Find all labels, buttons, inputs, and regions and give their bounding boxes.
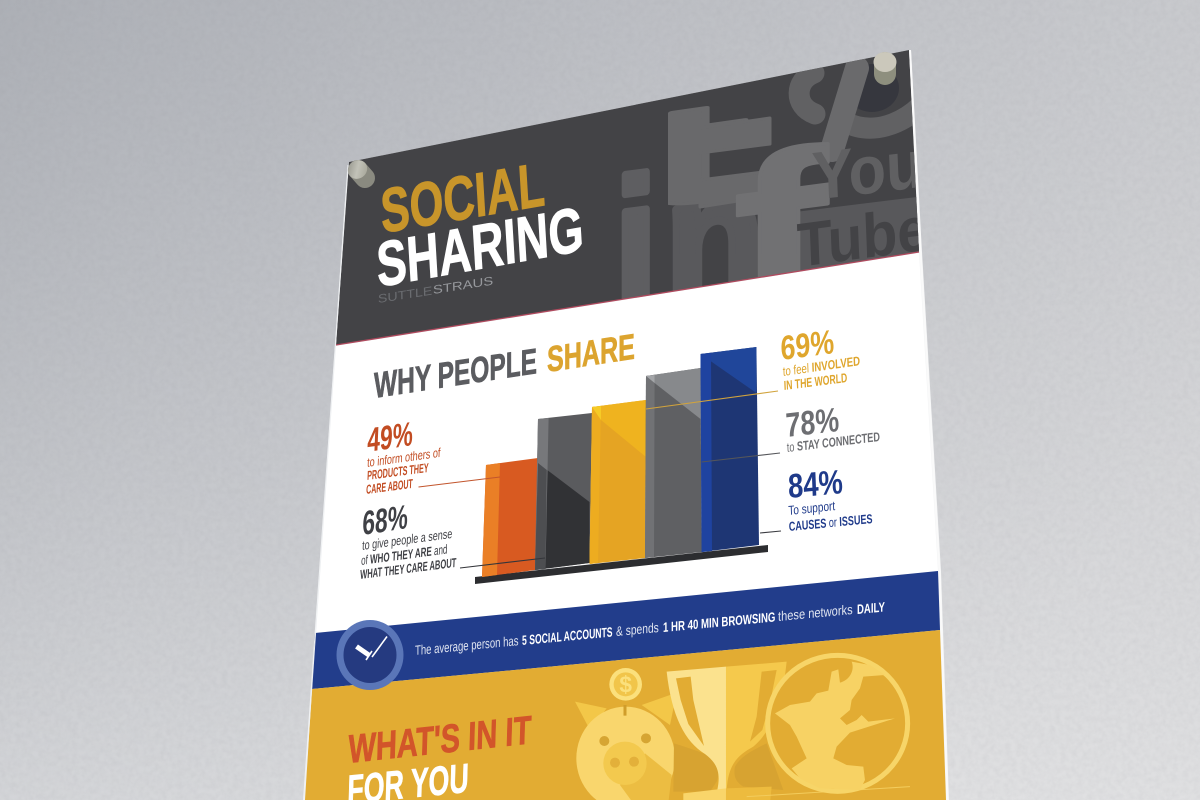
icons <box>575 655 910 800</box>
banner text: & spends <box>616 620 659 639</box>
callout: 49%: PRODUCTS THEY <box>367 460 429 483</box>
letter f: f <box>733 102 829 356</box>
callout: 78%: 78% <box>785 401 840 445</box>
callout: 68% <box>360 498 457 582</box>
title <box>375 150 585 301</box>
letter t <box>668 106 772 208</box>
heading: why people share: SHARE <box>547 326 635 380</box>
bar: blue 84% <box>700 347 759 552</box>
banner text: 5 SOCIAL ACCOUNTS <box>522 624 613 648</box>
callout: 49%: 49% <box>367 415 414 460</box>
banner text: DAILY <box>857 599 885 617</box>
Pinterest swirl <box>799 68 928 150</box>
callout: 69%: IN THE WORLD <box>784 370 847 393</box>
callout: 69% <box>780 323 860 393</box>
heading: what's in it for you: WHAT'S IN IT <box>348 708 532 772</box>
callout: 84%: To support <box>788 498 836 518</box>
callout: 68%: WHAT THEY CARE ABOUT <box>360 555 457 582</box>
Tube wordmark: Tube <box>796 194 930 281</box>
icon: coin <box>609 668 642 701</box>
bar: yellow 69% <box>590 400 646 564</box>
You wordmark: You <box>811 126 925 215</box>
heading: why people share: WHY PEOPLE <box>374 340 537 406</box>
title: SHARING <box>375 194 585 301</box>
letter t: t <box>622 66 751 243</box>
icon: trophy <box>667 662 787 800</box>
bar: gray 78% <box>645 368 702 558</box>
callout: 68%: 68% <box>362 498 409 543</box>
base <box>475 545 768 584</box>
icon: clock <box>336 620 404 690</box>
banner text: 1 HR 40 MIN BROWSING <box>663 609 775 635</box>
callout: 49%: to inform others of <box>367 445 441 470</box>
callout: 84%: 84% <box>787 463 844 506</box>
standoff shadow patch <box>858 64 899 112</box>
banner text: these networks <box>778 602 853 624</box>
bar: dark 68% <box>535 413 592 570</box>
heading: what's in it for you <box>347 708 532 800</box>
callout: 78%: to STAY CONNECTED <box>787 429 880 455</box>
icon: globe <box>768 655 908 791</box>
icon: piggy bank <box>575 693 677 800</box>
ground line <box>747 787 910 797</box>
logo wordmark <box>378 274 493 306</box>
background social logos <box>614 64 930 356</box>
callout: 84% <box>787 463 873 534</box>
banner text <box>415 599 885 658</box>
gold section <box>305 630 946 800</box>
callout: 49%: CARE ABOUT <box>366 476 413 497</box>
title: SOCIAL <box>379 150 547 247</box>
bar: orange 49% <box>482 458 538 577</box>
letter i: i <box>614 137 658 355</box>
white section: why people share <box>315 253 938 633</box>
callout: 78% <box>785 401 880 455</box>
standoff: top left <box>344 156 371 183</box>
callout: 69%: to feel INVOLVED <box>783 353 860 379</box>
callout: 68%: of WHO THEY ARE and <box>361 541 448 568</box>
header panel <box>336 50 930 356</box>
YouTube box <box>800 197 919 270</box>
poster panel <box>303 50 949 800</box>
callout: 49% <box>366 415 441 497</box>
callout: 69%: 69% <box>780 323 835 368</box>
standoff: top right <box>874 52 896 74</box>
leader lines <box>418 391 781 568</box>
icon: coin: $ <box>619 672 632 698</box>
logo wordmark: SUTTLE <box>378 283 432 306</box>
bar chart <box>418 347 781 584</box>
callout: 84%: CAUSES or ISSUES <box>789 511 873 534</box>
letter n: n <box>665 131 764 345</box>
blue banner <box>312 571 940 689</box>
logo wordmark: STRAUS <box>433 274 493 297</box>
banner text: The average person has <box>415 633 519 658</box>
poster highlights <box>304 50 948 800</box>
callout: 68%: to give people a sense <box>362 526 453 553</box>
